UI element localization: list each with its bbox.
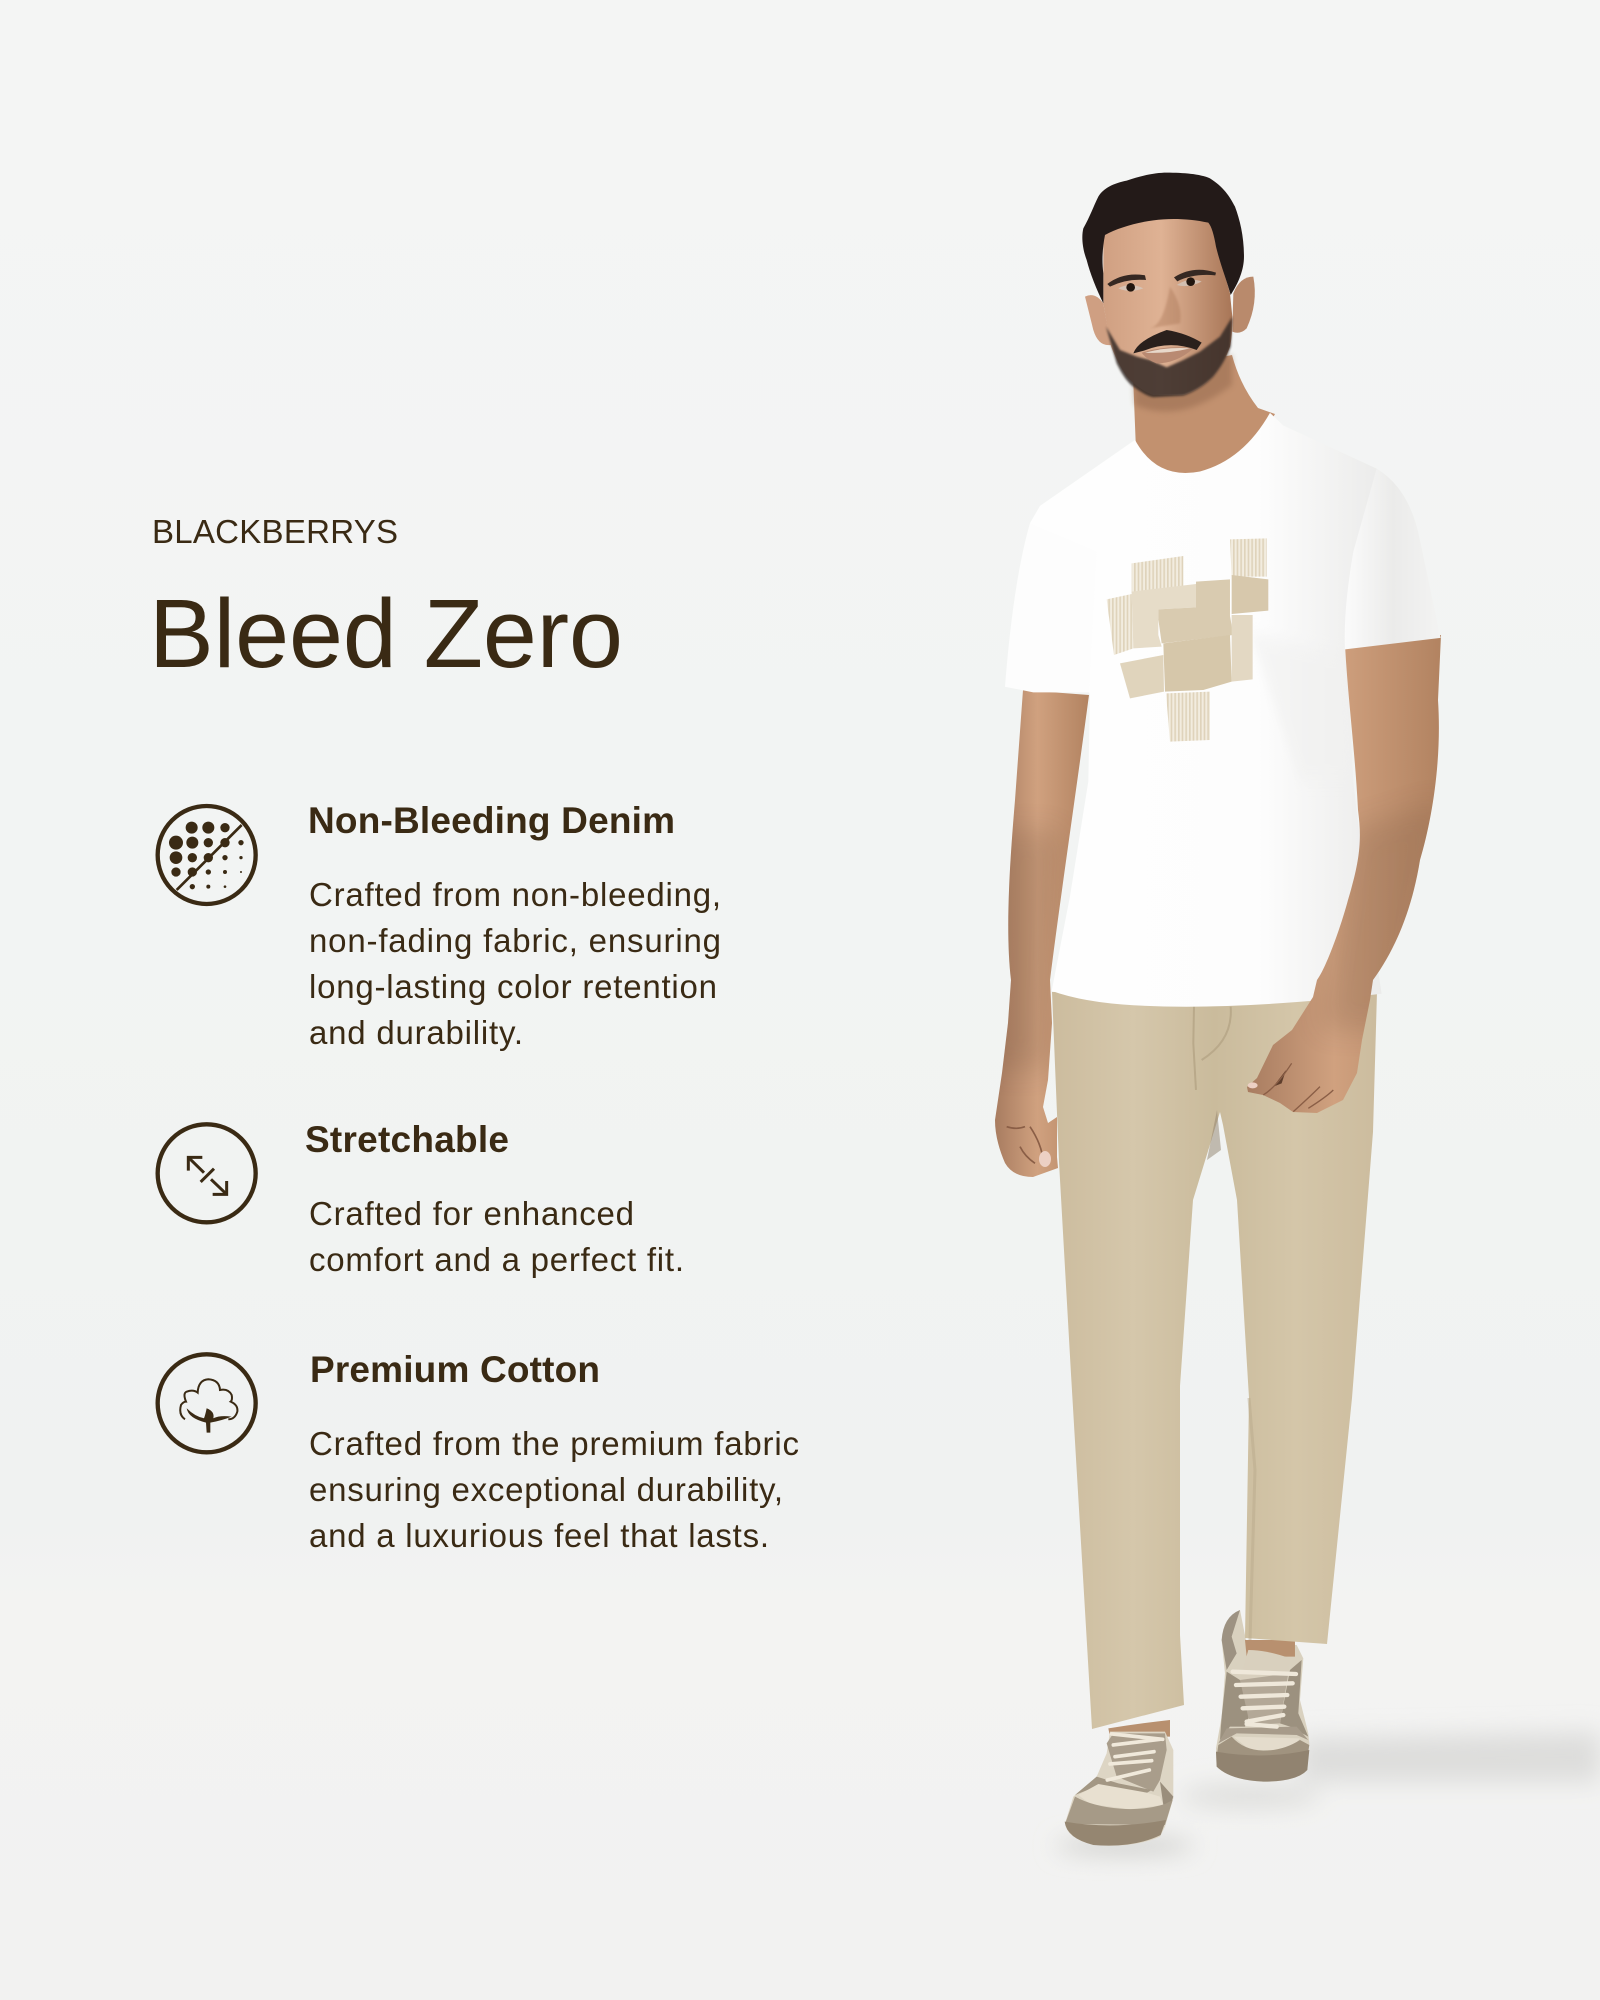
description: Crafted from non-bleeding,: [309, 876, 721, 913]
icon: stretch arrows: [158, 1124, 256, 1222]
floor shadow: [1055, 1732, 1600, 1853]
mustache: [1133, 330, 1202, 353]
description: ensuring exceptional durability,: [309, 1471, 783, 1508]
back shoe: [1216, 1610, 1309, 1782]
feature: premium cotton: [158, 1349, 799, 1554]
shirt graphic: [1107, 538, 1268, 742]
model figure: [990, 173, 1445, 1846]
heading: Non-Bleeding Denim: [308, 800, 675, 841]
nose and cheek shadow: [1149, 287, 1181, 328]
left arm and hand: [995, 690, 1089, 1177]
description: long-lasting color retention: [309, 968, 717, 1005]
description: non-fading fabric, ensuring: [309, 922, 721, 959]
beard: [1106, 317, 1232, 397]
mouth: [1142, 347, 1193, 363]
icon: cotton boll: [158, 1354, 256, 1452]
description: comfort and a perfect fit.: [309, 1241, 684, 1278]
title: Bleed Zero: [149, 579, 623, 688]
brand name: BLACKBERRYS: [152, 513, 398, 550]
hair: [1082, 173, 1244, 303]
description: and a luxurious feel that lasts.: [309, 1517, 769, 1554]
feature: stretchable: [158, 1119, 684, 1278]
shirt body: [1030, 413, 1382, 1007]
description: [309, 876, 721, 1051]
description: Crafted for enhanced: [309, 1195, 634, 1232]
right arm and hand: [1247, 635, 1441, 1113]
icon: halftone dots: [158, 806, 256, 904]
heading: Stretchable: [305, 1119, 509, 1160]
arms and hands: [990, 635, 1445, 1177]
hand details: [1007, 1063, 1333, 1167]
sleeves: [1005, 469, 1441, 692]
eyes: [1118, 285, 1143, 291]
description: [309, 1195, 684, 1278]
head: [1082, 173, 1255, 397]
feature: non-bleeding denim: [158, 800, 721, 1051]
description: Crafted from the premium fabric: [309, 1425, 799, 1462]
description: [309, 1425, 799, 1554]
forearm hair shading: [990, 800, 1445, 1070]
description: and durability.: [309, 1014, 523, 1051]
heading: Premium Cotton: [310, 1349, 600, 1390]
neck: [1133, 355, 1275, 477]
trousers: [1052, 992, 1377, 1729]
front shoe: [1065, 1720, 1173, 1846]
eyebrows: [1107, 274, 1146, 287]
